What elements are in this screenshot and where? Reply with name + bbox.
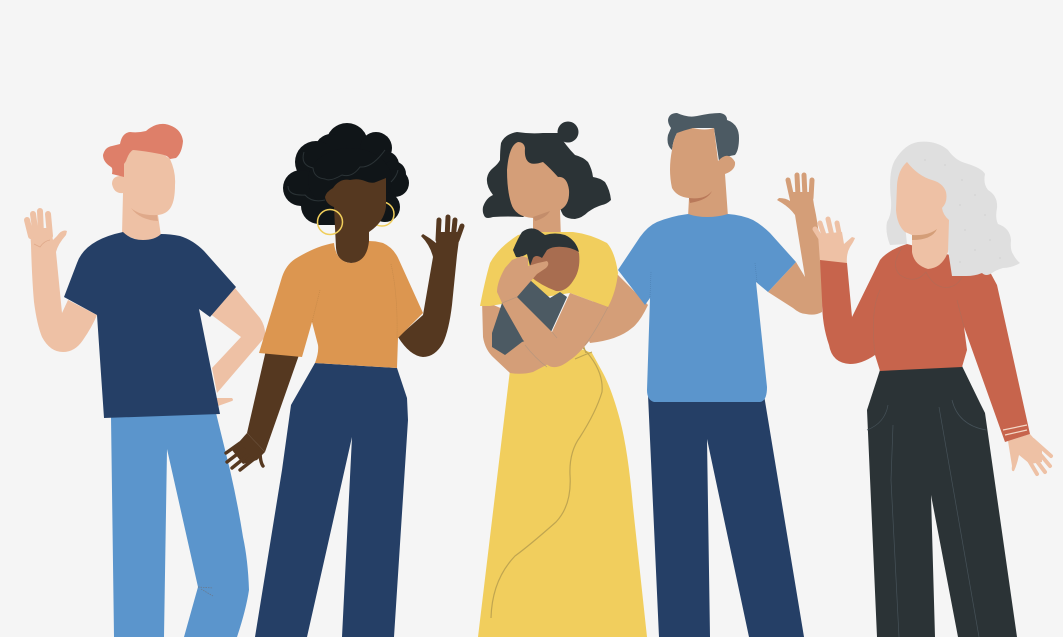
- hair: [283, 123, 409, 225]
- person 5: older woman with silver hair: [815, 142, 1051, 637]
- left arm and raised hand: [27, 211, 97, 352]
- hair: [668, 113, 739, 161]
- hair speckles: [924, 159, 1001, 263]
- hand lower: [1008, 434, 1051, 474]
- lower arm: [482, 300, 552, 374]
- navy t-shirt: [64, 232, 236, 418]
- left arm and hand: [226, 350, 299, 470]
- dress bodice: [480, 232, 618, 307]
- person 1: man with red hair: [27, 124, 265, 637]
- neck and face: [507, 142, 569, 240]
- earring left: [318, 210, 342, 234]
- terracotta sweater: [820, 244, 1030, 442]
- navy trousers: [648, 395, 804, 637]
- navy trousers: [255, 363, 408, 637]
- palm crease: [34, 240, 50, 247]
- earring right: [370, 202, 394, 226]
- sleeve seams: [312, 264, 397, 338]
- orange top: [259, 241, 423, 368]
- jeans knee crease: [198, 587, 213, 596]
- right arm on hip: [205, 282, 265, 406]
- man's arm behind her: [580, 272, 648, 343]
- neck and face: [325, 178, 386, 263]
- neck and face: [896, 162, 949, 269]
- silver hair: [886, 142, 1020, 276]
- neck shadow: [131, 208, 158, 221]
- black trousers: [867, 366, 1017, 637]
- chin shadow: [912, 229, 937, 240]
- chin shadow: [533, 211, 550, 221]
- hair bun: [558, 122, 578, 142]
- person 3: woman in yellow dress holding a baby: [478, 122, 648, 637]
- sleeve seams: [650, 263, 757, 298]
- collar and sweater seams: [873, 248, 964, 355]
- jeans: [111, 413, 249, 637]
- person 4: man with grey hair in blue t-shirt: [618, 113, 822, 637]
- arm and hand across the baby: [497, 256, 608, 367]
- dress seam and knot: [491, 342, 602, 618]
- yellow dress skirt: [478, 345, 647, 637]
- hair: [483, 132, 611, 219]
- hair: [103, 124, 183, 177]
- baby body: [492, 280, 567, 355]
- neck shadow: [689, 191, 712, 203]
- baby hair: [513, 228, 579, 266]
- raised hand: [815, 219, 855, 264]
- arm crease lines: [502, 297, 608, 367]
- blue t-shirt: [618, 214, 796, 402]
- cuff stripes: [1003, 425, 1027, 435]
- raised arm and hand: [768, 175, 822, 315]
- neck and face: [112, 150, 175, 242]
- person 2: woman with afro hair: [226, 123, 462, 637]
- trouser seams: [867, 400, 986, 637]
- baby head: [530, 243, 579, 291]
- right arm and hand: [398, 217, 462, 357]
- neck and face: [670, 128, 735, 217]
- hair curls: [288, 150, 398, 201]
